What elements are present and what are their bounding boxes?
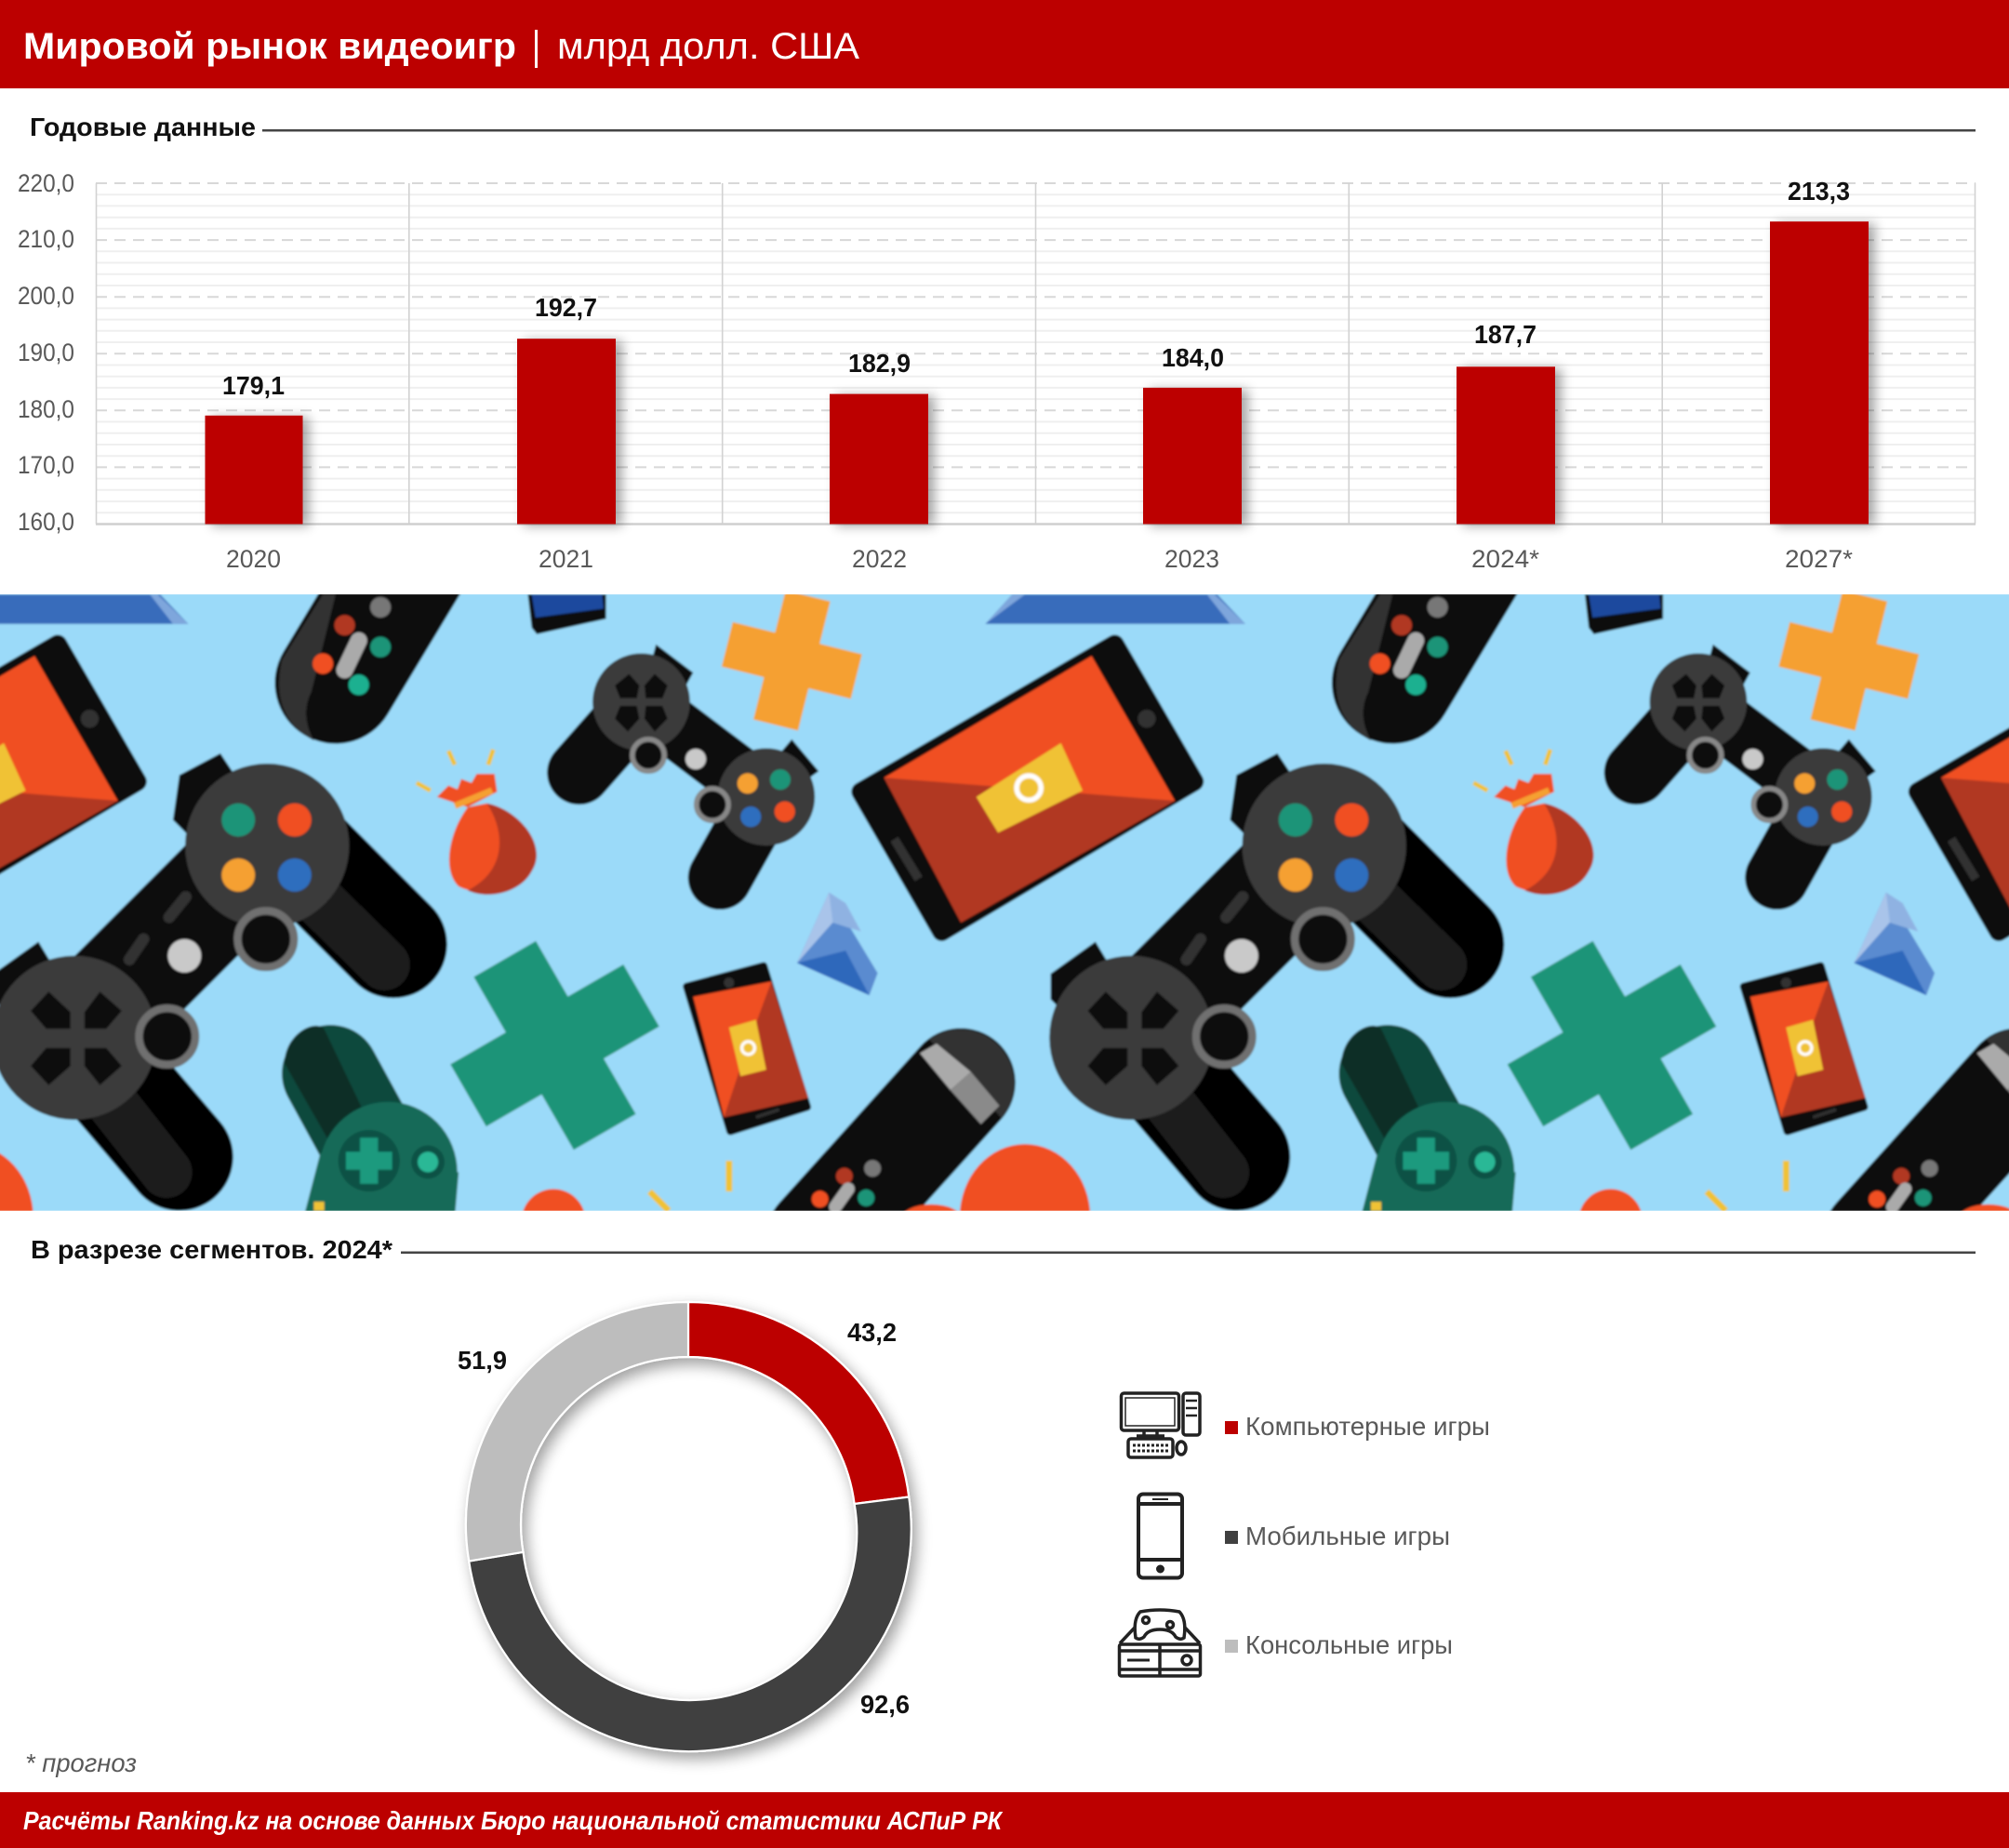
legend [1120,1393,1490,1676]
tablet [861,645,1194,931]
y axis labels: 170,0 [18,451,74,479]
source note: Расчёты Ranking.kz на основе данных Бюро национальной статистики АСПиР РК [23,1806,1004,1835]
unit subtitle: млрд долл. США [557,26,859,67]
value labels: 182,9 [848,349,911,378]
segment: mobile games [469,1497,911,1751]
y axis labels: 160,0 [18,508,74,536]
small controller [579,645,818,878]
x axis labels: 2023 [1164,545,1219,573]
header bar [0,0,2009,88]
x axis labels: 2022 [852,545,907,573]
money bag [417,750,537,895]
x axis labels: 2021 [539,545,593,573]
footer bar [0,1792,2009,1848]
y axis labels: 210,0 [18,225,74,253]
bottom orange bags [522,1144,1090,1290]
y axis labels: 180,0 [18,395,74,423]
bottom controller fragment [812,1030,1015,1239]
value labels: 192,7 [535,293,597,322]
title: Мировой рынок видеоигр [23,26,516,67]
top controller fragment [279,564,407,740]
x axis labels [226,545,1854,573]
value labels: 184,0 [1162,343,1224,372]
banner: video game pattern [0,594,2009,1211]
forecast note: * прогноз [25,1748,137,1777]
donut value labels: 92,6 [860,1690,910,1719]
legend: computer games: Компьютерные игры [1245,1412,1490,1441]
legend: console games: Консольные игры [1245,1630,1453,1659]
donut chart: segments 2024 [458,1302,911,1751]
value labels: 187,7 [1474,320,1537,349]
gem [797,892,878,995]
small phone [686,966,808,1131]
heading: annual data: Годовые данные [30,113,256,141]
legend: mobile games: Мобильные игры [1245,1522,1450,1550]
big controller [0,753,393,1172]
gem fragment top [985,594,1245,624]
value labels [222,177,1850,400]
blue phone fragment [528,594,606,634]
value labels: 213,3 [1788,177,1850,206]
orange cross [711,579,872,741]
bar chart: annual market [18,169,1976,573]
donut value labels: 43,2 [847,1318,897,1347]
y axis labels: 200,0 [18,282,74,310]
x axis labels: 2027* [1785,545,1854,573]
y axis labels: 190,0 [18,339,74,366]
value labels: 179,1 [222,371,285,400]
bottom sparks [649,1161,729,1211]
segment: computer games [688,1302,909,1504]
icon: game console [1120,1610,1200,1676]
icon: smartphone [1138,1494,1182,1577]
y axis labels [18,169,74,536]
green cross [419,909,691,1182]
x axis labels: 2024* [1471,545,1540,573]
green controller [285,1026,459,1243]
icon: desktop computer [1122,1393,1200,1457]
donut value labels [458,1318,910,1719]
y axis labels: 220,0 [18,169,74,197]
title separator [535,30,538,68]
bars [205,221,1869,524]
donut value labels: 51,9 [458,1346,507,1375]
heading: segments: В разрезе сегментов. 2024* [31,1235,392,1264]
x axis labels: 2020 [226,545,281,573]
segment: console games [466,1302,688,1562]
